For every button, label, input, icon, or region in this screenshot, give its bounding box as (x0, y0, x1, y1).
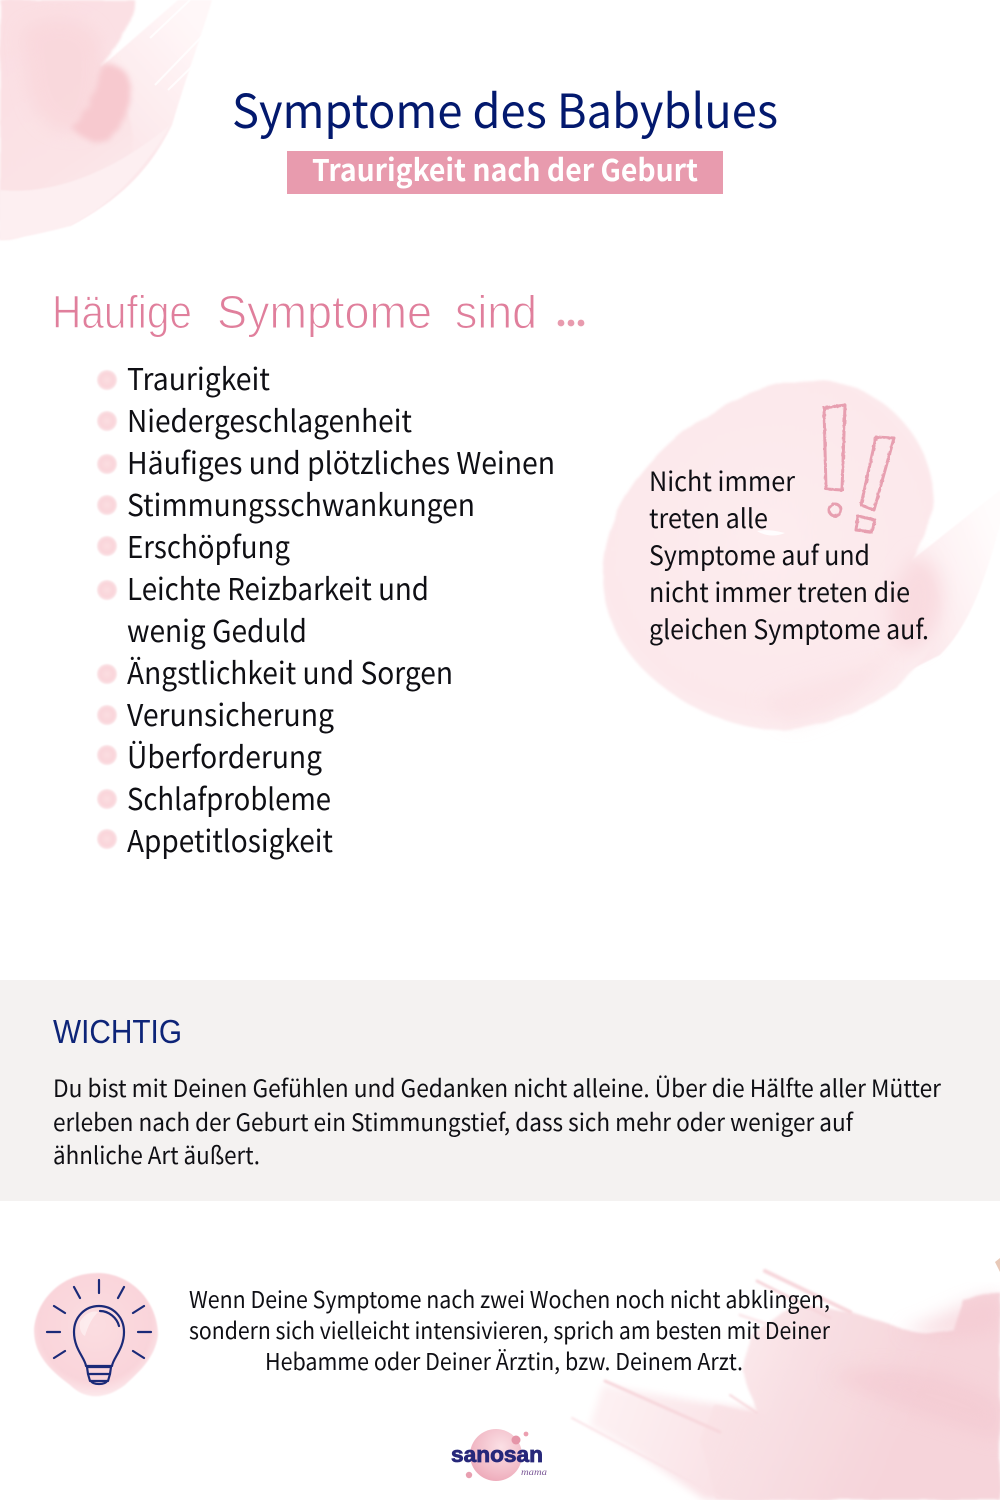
heading: common symptoms: Häufige (52, 286, 192, 338)
list text: wenig Geduld (127, 607, 307, 651)
list text: Niedergeschlagenheit (127, 397, 412, 441)
important text: erleben nach der Geburt ein Stimmungstief, dass sich mehr oder weniger auf (53, 1103, 854, 1138)
bullets (97, 370, 117, 849)
list text: Appetitlosigkeit (127, 817, 333, 861)
watercolor: callout blob (603, 381, 1000, 730)
heading: common symptoms (52, 286, 584, 338)
list text: Erschöpfung (127, 523, 290, 567)
watercolor: bottom right (572, 1258, 1000, 1500)
list text: Ängstlichkeit und Sorgen (127, 649, 453, 693)
important text: Du bist mit Deinen Gefühlen und Gedanken nicht alleine. Über die Hälfte aller Mütter (53, 1069, 942, 1104)
tip text: Hebamme oder Deiner Ärztin, bzw. Deinem Arzt. (265, 1343, 743, 1377)
callout text (649, 460, 929, 647)
logo: sanosan mama: sanosan (451, 1442, 543, 1467)
list text (127, 355, 555, 861)
callout text: treten alle (649, 497, 768, 536)
heading: common symptoms: Symptome (217, 286, 432, 338)
list text: Leichte Reizbarkeit und (127, 565, 429, 609)
tip text: sondern sich vielleicht intensivieren, sprich am besten mit Deiner (189, 1312, 830, 1346)
important text (53, 1069, 942, 1171)
symptom list (97, 355, 555, 861)
heading: common symptoms: sind (455, 286, 537, 338)
subtitle banner: Traurigkeit nach der Geburt (312, 146, 698, 190)
title: Symptome des Babyblues (232, 73, 778, 142)
tip text: Wenn Deine Symptome nach zwei Wochen noch nicht abklingen, (189, 1281, 830, 1315)
icon: exclamation marks (824, 405, 894, 532)
heading: important: WICHTIG (53, 1013, 182, 1050)
list text: Häufiges und plötzliches Weinen (127, 439, 555, 483)
tip text (189, 1281, 830, 1377)
list text: Überforderung (127, 733, 322, 777)
callout text: gleichen Symptome auf. (649, 608, 929, 647)
logo: sanosan mama: mama (521, 1467, 548, 1477)
watercolor: top left (0, 0, 214, 240)
important text: ähnliche Art äußert. (53, 1136, 260, 1171)
list text: Verunsicherung (127, 691, 334, 735)
list text: Stimmungsschwankungen (127, 481, 475, 525)
list text: Traurigkeit (127, 355, 270, 399)
list text: Schlafprobleme (127, 775, 331, 819)
logo: sanosan mama (451, 1429, 548, 1481)
callout text: Nicht immer (649, 460, 796, 499)
icon: light bulb (34, 1273, 158, 1396)
callout text: Symptome auf und (649, 534, 870, 573)
callout text: nicht immer treten die (649, 571, 910, 610)
panel: important (0, 980, 1000, 1201)
